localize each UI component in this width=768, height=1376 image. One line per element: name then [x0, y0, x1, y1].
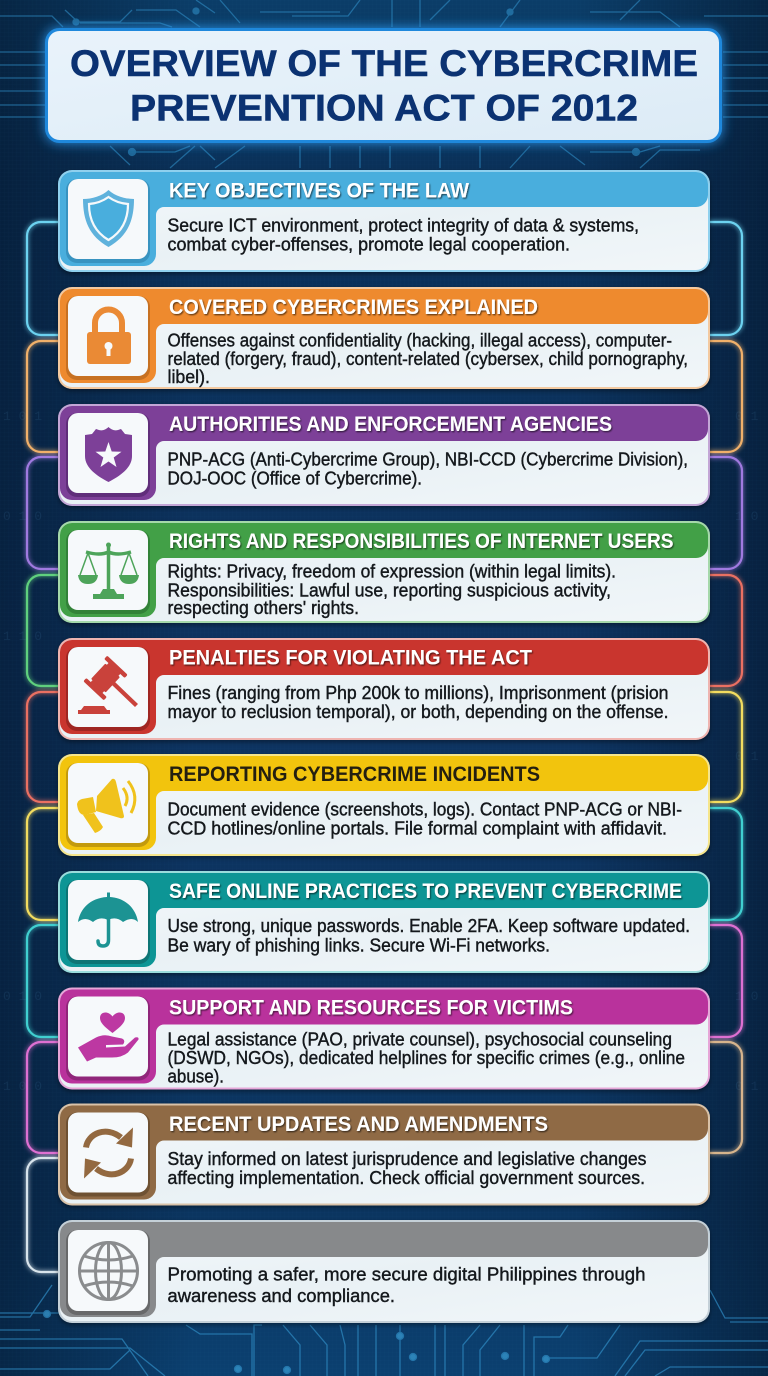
body text: related (forgery, fraud), content-related (cybersex, child pornography, [168, 348, 688, 369]
body text: combat cyber-offenses, promote legal cooperation. [168, 234, 570, 254]
icon: gavel [78, 656, 138, 714]
body text: Fines (ranging from Php 200k to millions), Imprisonment (prision [168, 682, 668, 703]
body text: mayor to reclusion temporal), or both, depending on the offense. [168, 701, 668, 722]
heading: REPORTING CYBERCRIME INCIDENTS [169, 763, 540, 786]
heading: SUPPORT AND RESOURCES FOR VICTIMS [169, 996, 573, 1020]
icon: scales of justice [78, 542, 139, 599]
heading: SAFE ONLINE PRACTICES TO PREVENT CYBERCRIME [169, 880, 682, 903]
binary digit texture: 0 1 0 [3, 509, 42, 524]
body text: Offenses against confidentiality (hacking, illegal access), computer- [168, 330, 672, 350]
body text: Secure ICT environment, protect integrity of data & systems, [168, 214, 639, 236]
body text: Stay informed on latest jurisprudence and legislative changes [168, 1148, 646, 1169]
body text [168, 1148, 646, 1188]
body text: Document evidence (screenshots, logs). Contact PNP-ACG or NBI- [168, 798, 682, 820]
panel: authorities [58, 404, 710, 506]
body text [168, 330, 688, 387]
heading: RECENT UPDATES AND AMENDMENTS [169, 1113, 548, 1136]
body text: Be wary of phishing links. Secure Wi-Fi networks. [168, 934, 550, 956]
connector brackets right [708, 222, 742, 1153]
icon: umbrella [78, 892, 138, 946]
icon: padlock [87, 310, 131, 364]
heading: KEY OBJECTIVES OF THE LAW [169, 180, 469, 202]
heading: RIGHTS AND RESPONSIBILITIES OF INTERNET USERS [169, 530, 674, 553]
panel: closing statement [58, 1220, 710, 1323]
panel: covered cybercrimes [58, 287, 710, 389]
binary digit texture: 1 0 1 [3, 409, 42, 424]
body text [168, 560, 616, 618]
body text: awareness and compliance. [168, 1285, 395, 1306]
heading: AUTHORITIES AND ENFORCEMENT AGENCIES [169, 413, 612, 436]
heading: COVERED CYBERCRIMES EXPLAINED [169, 296, 538, 319]
title text: OVERVIEW OF THE CYBERCRIME [70, 43, 698, 84]
body text [168, 682, 668, 722]
body text: PNP-ACG (Anti-Cybercrime Group), NBI-CCD (Cybercrime Division), [168, 448, 688, 470]
body text [168, 448, 688, 488]
body text: Responsibilities: Lawful use, reporting suspicious activity, [168, 580, 611, 600]
body text [168, 915, 690, 956]
body text [168, 1028, 685, 1086]
body text: respecting others' rights. [168, 597, 359, 618]
icon: shield [83, 190, 134, 247]
heading: PENALTIES FOR VIOLATING THE ACT [169, 646, 532, 670]
title panel [45, 28, 722, 143]
panel: penalties [58, 638, 710, 740]
binary digit texture: 1 0 [735, 509, 758, 524]
panel: reporting incidents [58, 754, 710, 856]
binary digit texture [3, 409, 759, 1094]
title text [70, 43, 698, 128]
panel: recent updates [58, 1104, 710, 1206]
icon: globe [80, 1242, 138, 1300]
title text: PREVENTION ACT OF 2012 [130, 88, 638, 128]
binary digit texture: 1 0 0 [3, 1079, 42, 1094]
body text: (DSWD, NGOs), dedicated helplines for specific crimes (e.g., online [168, 1047, 685, 1068]
panel: safe online practices [58, 871, 710, 973]
binary digit texture: 1 1 0 [3, 629, 42, 644]
binary digit texture: 0 1 [735, 1079, 759, 1094]
icon: heart in hand [78, 1013, 139, 1062]
binary digit texture: 1 0 [735, 989, 758, 1004]
icon: police badge [85, 427, 132, 482]
panel: key objectives [58, 170, 710, 272]
body text: DOJ-OOC (Office of Cybercrime). [168, 468, 422, 488]
binary digit texture: 0 1 [735, 409, 759, 424]
body text [168, 798, 682, 838]
body text: Legal assistance (PAO, private counsel), psychosocial counseling [168, 1028, 672, 1050]
body text [168, 1264, 646, 1306]
body text: Use strong, unique passwords. Enable 2FA. Keep software updated. [168, 915, 690, 936]
circuit traces bottom [0, 1285, 768, 1376]
body text: affecting implementation. Check official government sources. [168, 1167, 645, 1188]
panel: rights and responsibilities [58, 521, 710, 623]
body text: libel). [168, 366, 210, 387]
body text: abuse). [168, 1066, 224, 1086]
connector brackets left [27, 222, 60, 1272]
icon: megaphone [77, 779, 135, 833]
binary digit texture: 0 1 0 [3, 989, 42, 1004]
body text [168, 214, 639, 254]
circuit traces top [0, 0, 768, 168]
body text: Rights: Privacy, freedom of expression (within legal limits). [168, 560, 616, 582]
body text: CCD hotlines/online portals. File formal complaint with affidavit. [168, 818, 667, 838]
panel: support for victims [58, 988, 710, 1090]
binary digit texture: 0 1 [735, 749, 759, 764]
icon: refresh arrows [84, 1128, 133, 1178]
body text: Promoting a safer, more secure digital Philippines through [168, 1264, 646, 1284]
